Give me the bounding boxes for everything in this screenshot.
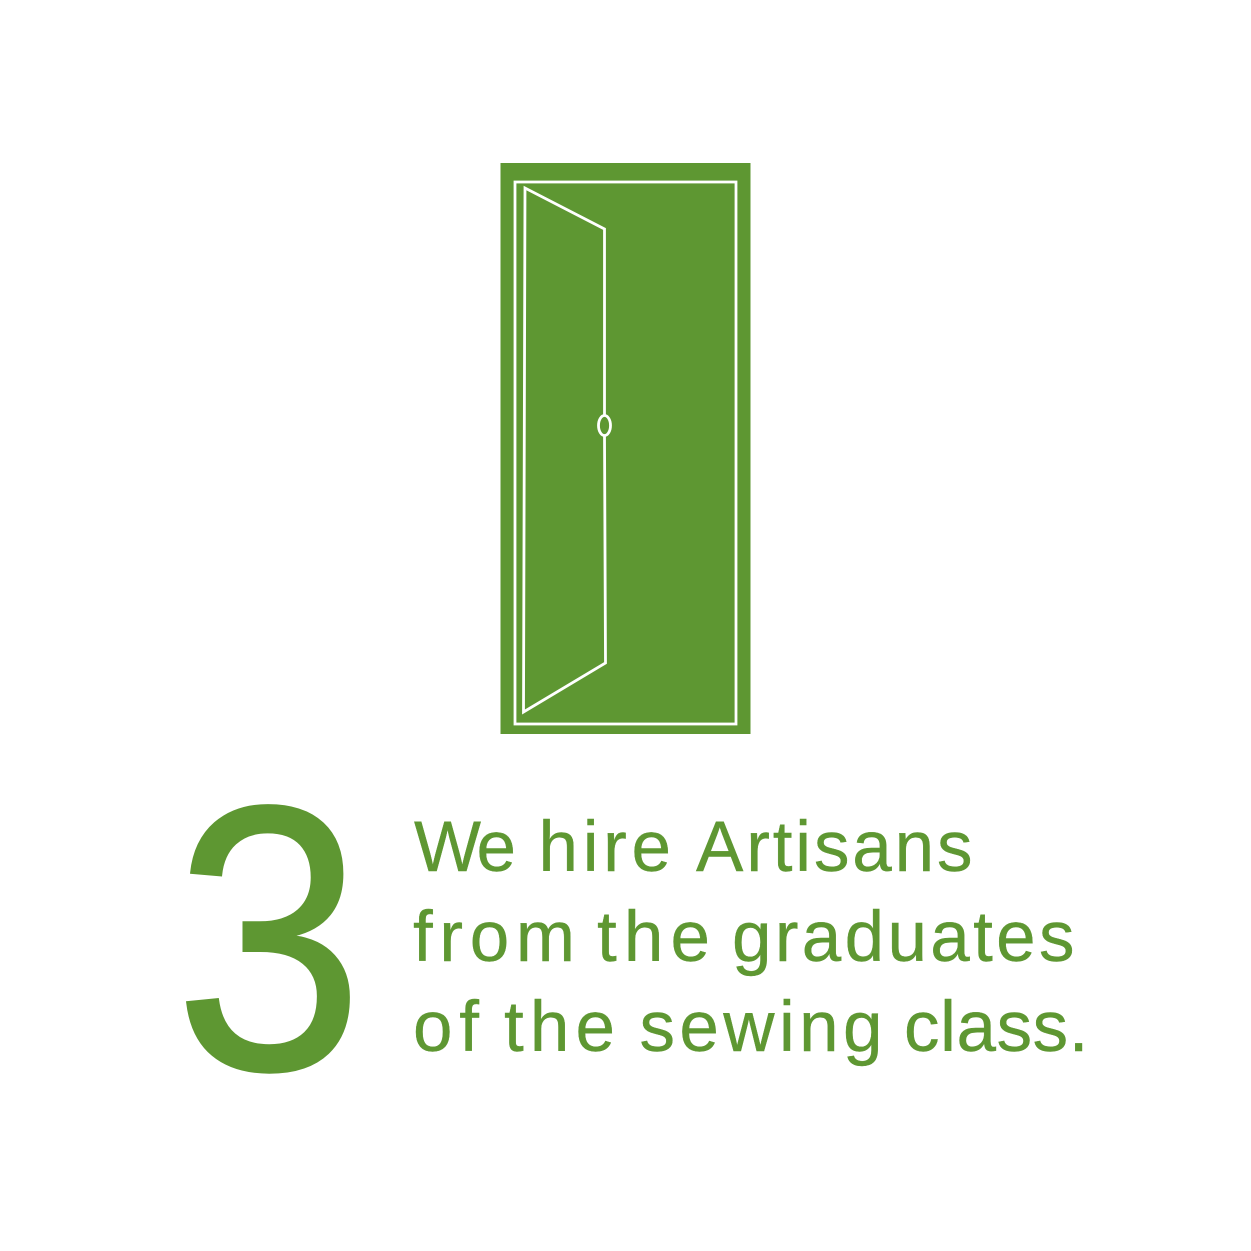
- description text: the: [504, 988, 615, 1067]
- description text: graduates: [732, 898, 1074, 977]
- description text: of: [413, 988, 479, 1067]
- description text: the: [597, 898, 710, 977]
- description text: Artisans: [696, 808, 972, 887]
- icon: open door: [500, 163, 750, 734]
- step number 3: 3: [174, 728, 364, 1150]
- description text: We: [414, 808, 516, 887]
- description text: hire: [538, 808, 671, 887]
- description text: sewing: [640, 988, 882, 1067]
- description text: class.: [904, 988, 1088, 1067]
- description text: [413, 808, 1088, 1067]
- description text: from: [413, 898, 575, 977]
